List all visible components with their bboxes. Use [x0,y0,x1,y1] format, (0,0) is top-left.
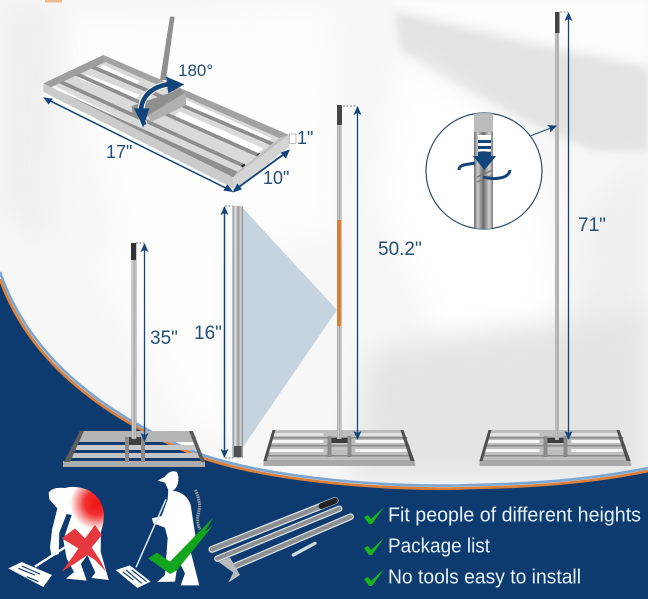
arrow: 10 inch [233,149,290,193]
item: no tools easy to install: No tools easy to install [388,566,581,588]
arrow: 180 degree rotation [134,77,184,127]
dimension arrow [356,107,358,439]
feature list [364,504,641,588]
product: tray with rotating bracket, top view [43,17,296,193]
grip [555,12,560,33]
arrow: push down [473,135,496,170]
navy footer band with curved edge [0,272,648,599]
rake at 50.2 inch [264,105,422,466]
dimension labels: tray [106,61,313,188]
dimension arrow [224,207,226,457]
icon: red cross [62,525,106,572]
grip [337,105,342,125]
dimension labels: tray: 10" [263,168,289,188]
spine [195,490,200,529]
projection [241,206,337,447]
dimension labels: tray: 1" [297,128,313,148]
arrow: twist [459,163,510,179]
grip [131,243,136,260]
tray bed [50,58,282,175]
bracket [132,89,186,117]
rails [43,55,105,87]
package contents: tubes, bracket and bolt [212,501,351,583]
dimension labels: tray: 180° [178,61,213,80]
rake at 71 inch [480,12,632,466]
label: 16" [194,323,222,344]
dimension arrow [144,244,146,441]
footer illustrations [8,471,351,588]
rake head [264,430,416,466]
dimension labels: tray: 17" [106,142,132,162]
handle [132,243,136,439]
callout: twist-lock detail [426,112,556,230]
mop [116,565,151,588]
handle [160,17,175,80]
arrow: 17 inch [43,97,233,192]
dimension arrow [568,13,570,439]
label: 35" [150,328,178,349]
rake at 35 inch [63,243,205,467]
handle [555,12,559,440]
tube [232,206,243,458]
item: package list: Package list [388,536,490,558]
icon: bent-over person, incorrect posture [8,487,109,587]
mop [8,562,52,587]
icon: upright person, correct posture [116,471,213,588]
rake head [480,430,632,466]
icon: green check [148,517,213,574]
handle [337,105,342,439]
orange highlighted section [337,220,342,326]
item: fit people of different heights: Fit people of different heights [388,504,641,526]
rake head [63,431,205,467]
label: 71" [578,215,606,236]
label: 50.2" [378,239,422,260]
tube section at 16 inch [194,206,337,458]
